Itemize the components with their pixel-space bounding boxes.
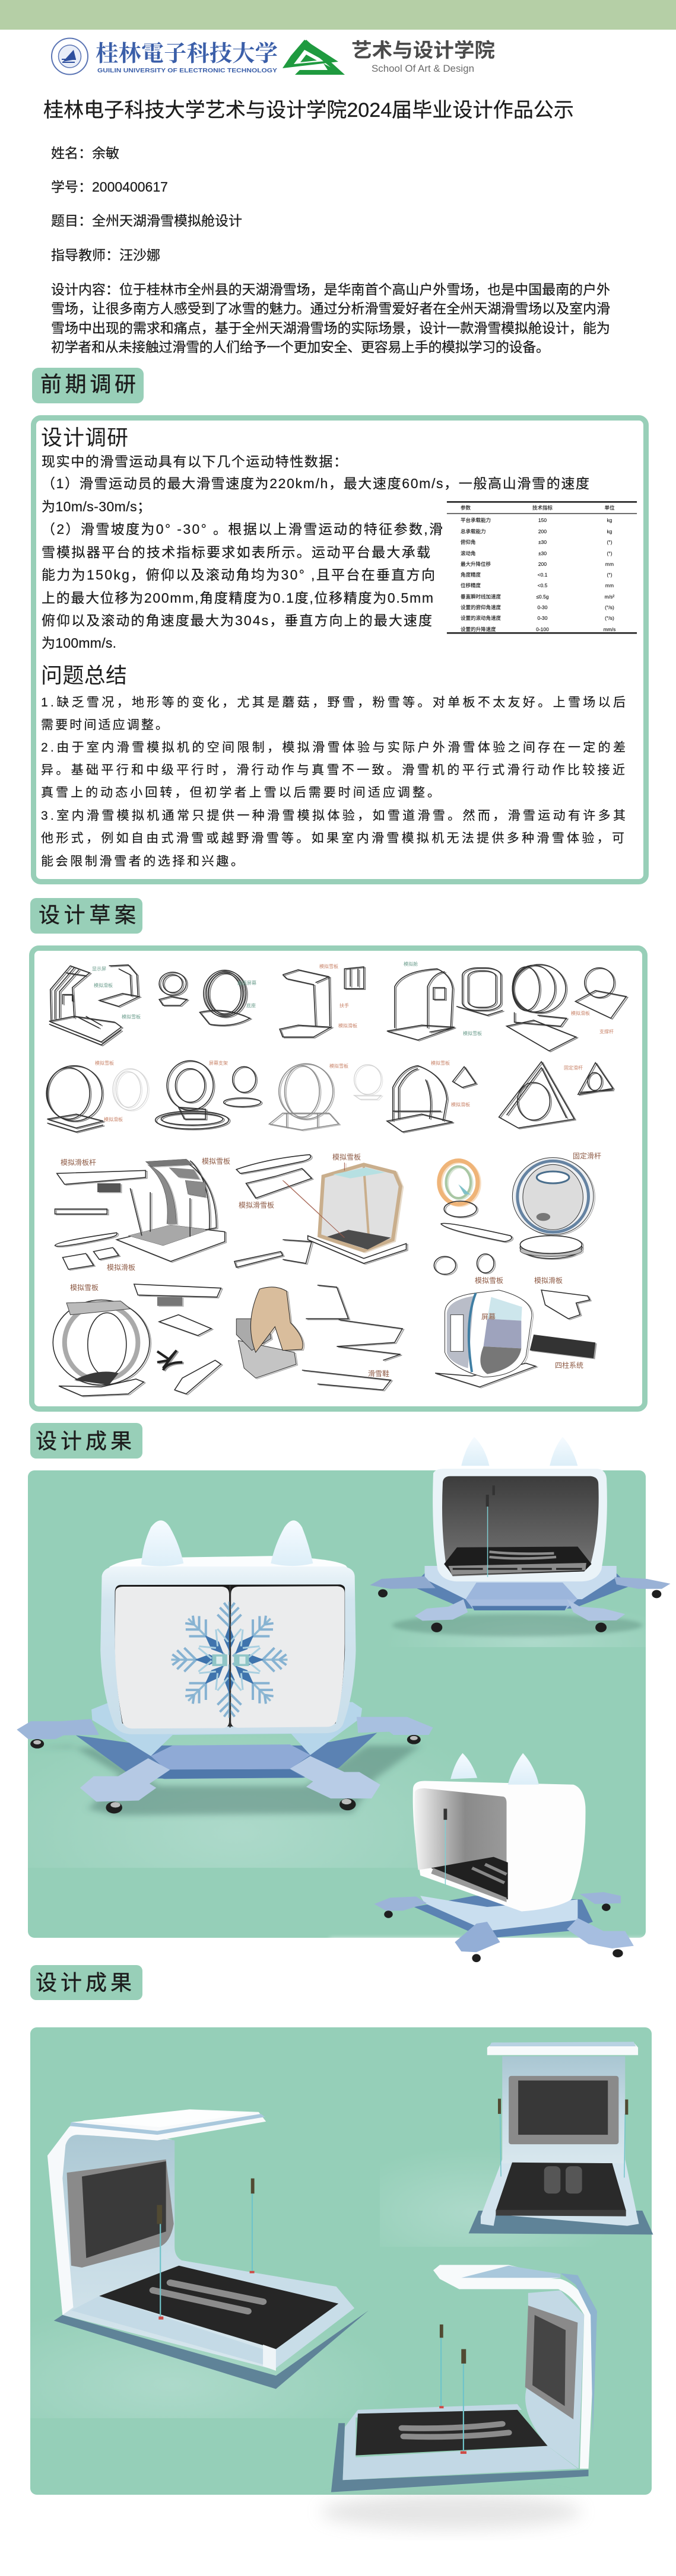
table: platform specs: ≤0.5g xyxy=(536,594,549,600)
panel: render snow capsule xyxy=(0,1437,676,1976)
problem list: 真雪上的动态小回转，但初学者上雪以后需要时间适应调整。 xyxy=(41,786,440,800)
right rail xyxy=(179,2260,354,2368)
college name: 艺术与设计学院 xyxy=(351,39,495,61)
student info xyxy=(51,145,242,263)
sketch: beige frame booth xyxy=(234,1155,406,1268)
table: platform specs: <0.1 xyxy=(538,572,548,578)
shadow under panel xyxy=(320,2494,582,2530)
section heading: results one xyxy=(30,1423,142,1459)
research text: （1）滑雪运动员的最大滑雪速度为220km/h，最大速度60m/s，一般高山滑雪的速度 xyxy=(42,476,589,491)
product: left view xyxy=(47,2109,369,2389)
design description: 初学者和从未接触过滑雪的人们给予一个更加安全、更容易上手的模拟学习的设备。 xyxy=(51,339,550,355)
soft white floor patch xyxy=(330,1938,675,1976)
base plate xyxy=(54,2310,369,2389)
sketch: portal ring xyxy=(155,1061,261,1129)
panel: research xyxy=(33,418,646,881)
side rails xyxy=(481,2160,639,2226)
ski pole xyxy=(486,1485,495,1577)
design description: 雪场，让很多南方人感受到了冰雪的魅力。通过分析滑雪爱好者在全州天湖滑雪场以及室内滑 xyxy=(51,301,610,316)
product: right view xyxy=(331,2265,597,2492)
top plate xyxy=(487,2042,638,2055)
university name: 桂林電子科技大学 xyxy=(96,35,278,68)
base plate xyxy=(331,2423,589,2492)
sketch annotations: 模拟滑板 xyxy=(571,1010,590,1016)
sketch annotations: 滑雪鞋 xyxy=(368,1369,389,1378)
problem list xyxy=(41,696,626,868)
table: platform specs: (°/s) xyxy=(605,604,614,610)
top plate xyxy=(70,2109,266,2141)
product: front view xyxy=(469,2042,653,2234)
sketch annotations: 模拟雪板 xyxy=(70,1284,99,1292)
panel: sketches xyxy=(32,948,645,1409)
table: platform specs: 单位 xyxy=(604,505,615,511)
snowflake artwork xyxy=(171,1601,287,1718)
research text: 为100mm/s. xyxy=(42,635,116,651)
sketch annotations: 底座 xyxy=(246,1002,256,1008)
screen xyxy=(67,2160,174,2268)
student info: 指导教师：汪沙娜 xyxy=(51,247,160,263)
ski poles xyxy=(439,2325,466,2454)
section heading: sketches xyxy=(30,898,142,934)
table: platform specs: 参数 xyxy=(461,505,471,511)
sketch annotations: 模拟雪板 xyxy=(463,1030,482,1036)
floor mat xyxy=(496,2163,626,2211)
section heading: research xyxy=(32,368,144,403)
table: platform specs: 位移精度 xyxy=(461,582,481,588)
design description: 设计内容：位于桂林市全州县的天湖滑雪场，是华南首个高山户外雪场，也是中国最南的户外 xyxy=(51,282,610,297)
table: platform specs: 总承载能力 xyxy=(461,528,486,534)
ski poles xyxy=(157,2179,255,2320)
table: platform specs: 滚动角 xyxy=(461,550,476,556)
sketch: arch with steps xyxy=(387,1066,476,1132)
table: platform specs: mm/s xyxy=(604,626,615,632)
table: platform specs xyxy=(447,501,637,633)
ramp xyxy=(342,2404,577,2480)
research text: 为10m/s-30m/s； xyxy=(42,499,151,514)
table: platform specs: 150 xyxy=(538,517,547,523)
sketch annotations: 模拟滑板 xyxy=(534,1276,563,1285)
ears xyxy=(461,1437,577,1466)
floor shadow xyxy=(392,1614,642,1636)
capsule shell xyxy=(100,1556,356,1734)
table: platform specs: 0-30 xyxy=(537,604,548,610)
college logo xyxy=(283,39,495,75)
sketch annotations: 模拟雪板 xyxy=(95,1060,114,1066)
sketch annotations: 模拟雪板 xyxy=(319,963,338,969)
sketch: triangle booth xyxy=(499,1062,612,1128)
student info: 姓名：余敏 xyxy=(51,145,119,161)
table: platform specs: ±30 xyxy=(538,550,547,556)
sketch annotations: 屏幕支架 xyxy=(209,1060,228,1066)
student info: 题目：全州天湖滑雪模拟舱设计 xyxy=(51,213,242,228)
outer shell xyxy=(459,2279,596,2469)
research text: 雪模拟器平台的技术指标要求如表所示。运动平台最大承载 xyxy=(42,545,430,560)
table: platform specs: ±30 xyxy=(538,539,547,545)
table: platform specs: 设置的升降速度 xyxy=(461,626,496,632)
sketch: arch booth xyxy=(49,965,139,1045)
section heading: results two: 设计成果 xyxy=(36,1970,132,1995)
sketch annotations: 支撑杆 xyxy=(599,1029,614,1034)
floor mat xyxy=(99,2266,338,2349)
casters xyxy=(384,1903,623,1962)
wall xyxy=(47,2126,276,2370)
design description: 雪场中出现的需求和痛点，基于全州天湖滑雪场的实际场景，设计一款滑雪模拟舱设计，能为 xyxy=(51,320,610,336)
university english name: GUILIN UNIVERSITY OF ELECTRONIC TECHNOLOGY xyxy=(97,68,277,74)
sketch annotations: 模拟滑板杆 xyxy=(61,1158,96,1167)
top band xyxy=(0,0,676,30)
sketch annotations: 模拟舱 xyxy=(404,961,418,967)
doors xyxy=(115,1586,345,1728)
table: platform specs: 设置的滚动角速度 xyxy=(461,615,502,621)
section heading: results two xyxy=(30,1965,142,2000)
base xyxy=(370,1566,671,1620)
sketch annotations xyxy=(61,961,614,1378)
base xyxy=(17,1702,433,1801)
sketch annotations: 模拟雪板 xyxy=(329,1063,348,1069)
sketch annotations: 模拟雪板 xyxy=(122,1014,141,1020)
sketch: beige seat xyxy=(236,1285,402,1390)
light floor glow xyxy=(0,1601,676,1957)
university logo xyxy=(52,35,278,75)
ears xyxy=(141,1520,313,1566)
sketch annotations: 模拟滑板 xyxy=(104,1116,123,1122)
title: 桂林电子科技大学艺术与设计学院2024届毕业设计作品公示 xyxy=(43,99,574,122)
product: side view xyxy=(330,1753,675,1976)
problem list: 能会限制滑雪者的选择和兴趣。 xyxy=(41,855,243,868)
shell and interior xyxy=(433,1469,607,1581)
sketch annotations: 模拟滑板 xyxy=(338,1023,357,1029)
product: open view xyxy=(370,1437,671,1636)
sketch: orb booth xyxy=(159,970,250,1026)
icon: university seal xyxy=(52,38,88,75)
table: platform specs: mm xyxy=(605,582,614,588)
ears xyxy=(450,1753,539,1785)
table: platform specs: mm xyxy=(605,561,614,567)
problem list: 1.缺乏雪况，地形等的变化，尤其是蘑菇，野雪，粉雪等。对单板不太友好。上雪场以后 xyxy=(41,696,626,709)
table: platform specs: (°/s) xyxy=(605,615,614,621)
floor mat xyxy=(356,2410,548,2456)
problem list: 需要时间适应调整。 xyxy=(41,718,168,732)
table: platform specs: 俯仰角 xyxy=(461,539,476,545)
sketch: cantilever detail xyxy=(55,1159,225,1269)
research text: 上的最大位移为200mm,角度精度为0.1度,位移精度为0.5mm xyxy=(42,590,433,606)
sketch annotations: 固定滑杆 xyxy=(573,1151,601,1160)
sketch annotations: 模拟滑板 xyxy=(107,1263,135,1272)
casters xyxy=(30,1735,421,1813)
shell and interior xyxy=(413,1781,586,1911)
sketch annotations: 模拟雪板 xyxy=(475,1276,503,1285)
ramp xyxy=(71,2296,276,2368)
research text: （2）滑雪坡度为0° -30° 。根据以上滑雪运动的特征参数,滑 xyxy=(42,521,443,537)
table: platform specs: 垂直瞬时线加速度 xyxy=(461,594,502,600)
sketch annotations: 屏幕 xyxy=(481,1313,496,1321)
table: platform specs: kg xyxy=(607,517,612,523)
section heading: results one: 设计成果 xyxy=(36,1429,132,1453)
panel: render interior xyxy=(0,2027,653,2530)
sketches: rows one and two xyxy=(46,964,626,1132)
student info: 学号：2000400617 xyxy=(51,179,168,195)
sketch annotations: 模拟滑雪板 xyxy=(239,1201,274,1209)
door seam xyxy=(229,1585,231,1727)
table: platform specs: 最大升降位移 xyxy=(461,561,491,567)
base xyxy=(375,1892,634,1952)
sketch annotations: 扶手 xyxy=(339,1002,349,1008)
screen xyxy=(525,2306,577,2419)
table: platform specs: 200 xyxy=(538,528,547,534)
table: platform specs: 0-30 xyxy=(537,615,548,621)
sketch: round pod xyxy=(434,1158,594,1274)
design description xyxy=(51,282,610,355)
floor shadow xyxy=(28,1746,421,1816)
sketch annotations: 模拟雪板 xyxy=(202,1157,230,1166)
table: platform specs: kg xyxy=(607,528,612,534)
sketch: ring booth xyxy=(507,964,626,1051)
sketch annotations: 四柱系统 xyxy=(555,1361,583,1370)
sketch: light ring xyxy=(269,1063,381,1130)
problem list: 他形式，例如自由式滑雪或越野滑雪等。如果室内滑雪模拟机无法提供多种滑雪体验，可 xyxy=(41,832,624,845)
wall xyxy=(502,2056,625,2163)
problem list: 3.室内滑雪模拟机通常只提供一种滑雪模拟体验，如雪道滑雪。然而，滑雪运动有许多其 xyxy=(41,809,626,823)
heading: problem summary: 问题总结 xyxy=(41,663,127,687)
research text: 现实中的滑雪运动具有以下几个运动特性数据： xyxy=(42,454,347,469)
ski poles xyxy=(498,2099,628,2177)
top plate xyxy=(433,2265,560,2289)
product: front view with snowflake doors xyxy=(17,1520,433,1816)
light floor glow xyxy=(0,2147,617,2467)
research text: 能力为150kg，俯仰以及滚动角均为30° ,且平台在垂直方向 xyxy=(42,567,435,582)
skis xyxy=(544,2166,582,2193)
sketch: thick ring xyxy=(53,1284,221,1396)
table: platform specs: 0-100 xyxy=(536,626,549,632)
door latches xyxy=(212,1654,249,1666)
ski pole xyxy=(443,1808,447,1885)
table: platform specs: 平台承载能力 xyxy=(461,517,491,523)
base plate xyxy=(469,2211,653,2234)
table: platform specs: (°) xyxy=(607,539,612,545)
table: platform specs: (°) xyxy=(607,550,612,556)
skis xyxy=(402,2424,509,2437)
sketch annotations: 曲面屏幕 xyxy=(237,980,256,986)
research text: 俯仰以及滚动的角速度最大为304s，垂直方向上的最大速度 xyxy=(42,613,432,628)
sketch annotations: 模拟雪板 xyxy=(431,1060,450,1066)
problem list: 异。基础平行和中级平行时，滑行动作与真雪不一致。滑雪机的平行式滑行动作比较接近 xyxy=(41,763,625,777)
sketch annotations: 模拟滑板 xyxy=(94,982,113,988)
section heading: research: 前期调研 xyxy=(40,372,136,396)
table: platform specs: <0.5 xyxy=(538,582,548,588)
heading: design research: 设计调研 xyxy=(41,425,128,450)
college english name: School Of Art & Design xyxy=(372,63,474,74)
casters xyxy=(378,1589,661,1632)
outer white shell xyxy=(47,2124,173,2315)
problem list: 2.由于室内滑雪模拟机的空间限制，模拟滑雪体验与实际户外滑雪体验之间存在一定的差 xyxy=(41,741,626,754)
section heading: sketches: 设计草案 xyxy=(39,903,136,927)
skis xyxy=(153,2283,263,2311)
sketch: cantilever booth xyxy=(280,967,364,1037)
sketch: capsule booth xyxy=(387,968,503,1040)
table: platform specs: (°) xyxy=(607,572,612,578)
sketch: rounded pod xyxy=(435,1290,595,1387)
inner wall xyxy=(525,2290,584,2469)
table: platform specs: 角度精度 xyxy=(461,572,481,578)
sketch annotations: 固定滑杆 xyxy=(564,1065,583,1071)
sketch annotations: 模拟滑板 xyxy=(451,1101,470,1107)
sketch annotations: 显示屏 xyxy=(92,966,106,972)
table: platform specs: 技术指标 xyxy=(532,505,553,511)
sketch: ring with ghost copy xyxy=(46,1066,148,1132)
research text xyxy=(42,454,589,651)
icon: green triangles xyxy=(283,40,345,75)
table: platform specs: 设置的俯仰角速度 xyxy=(461,604,502,610)
table: platform specs: 200 xyxy=(538,561,547,567)
sketches: rows three and four xyxy=(53,1155,595,1396)
table: platform specs: m/s² xyxy=(605,594,614,600)
screen xyxy=(509,2076,618,2144)
sketch annotations: 模拟雪板 xyxy=(332,1153,361,1161)
